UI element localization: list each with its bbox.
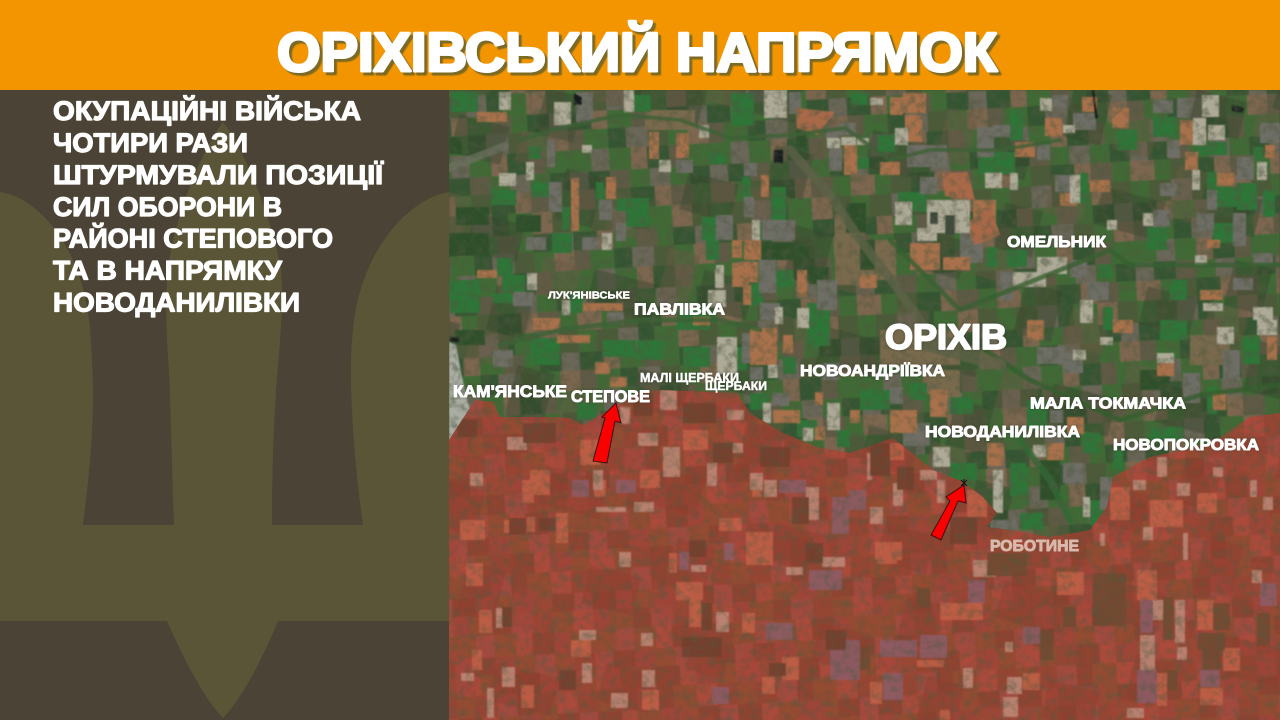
noise texture (449, 90, 1280, 533)
label: Мала Токмачка: МАЛА ТОКМАЧКА (1030, 396, 1186, 412)
header band (0, 0, 1280, 90)
label: Новоандріївка: НОВОАНДРІЇВКА (800, 362, 945, 380)
label: Омельник: ОМЕЛЬНИК (1007, 234, 1106, 251)
arrow: assault toward Stepove (593, 403, 621, 463)
label: Щербаки: ЩЕРБАКИ (705, 379, 767, 393)
ponds (450, 90, 1244, 342)
reservoir at the western edge (449, 342, 470, 445)
label: Новоданилівка: НОВОДАНИЛІВКА (925, 424, 1080, 441)
label: Роботине: РОБОТИНЕ (990, 538, 1079, 555)
panel: satellite map (449, 90, 1280, 720)
label: Лук'янівське: ЛУК'ЯНІВСЬКЕ (548, 290, 630, 302)
label: Кам'янське: КАМ'ЯНСЬКЕ (453, 382, 567, 401)
impact marker (961, 479, 967, 487)
label: Степове: СТЕПОВЕ (571, 387, 650, 406)
left panel background (0, 90, 449, 720)
texture over occupied territory (449, 385, 1280, 720)
line 6: ТА В НАПРЯМКУ (53, 256, 283, 286)
fields in occupied territory (457, 390, 1277, 720)
farmland fields north of the front line (449, 90, 1280, 533)
line 1: ОКУПАЦІЙНІ ВІЙСЬКА (53, 95, 361, 126)
line 5: РАЙОНІ СТЕПОВОГО (53, 222, 333, 254)
label: Оріхів: ОРІХІВ (885, 318, 1007, 357)
arrow: assault toward Novodanylivka (931, 485, 966, 540)
label: Малі Щербаки: МАЛІ ЩЕРБАКИ (640, 370, 739, 385)
title: ОРІХІВСЬКИЙ НАПРЯМОК (277, 20, 997, 83)
underlying farmland (449, 408, 1112, 533)
line 3: ШТУРМУВАЛИ ПОЗИЦІЇ (53, 160, 385, 190)
map labels (453, 234, 1259, 454)
map base patchwork (449, 90, 1280, 537)
river corridors and villages (449, 115, 1280, 520)
label: Павлівка: ПАВЛІВКА (634, 302, 725, 318)
occupied territory (red overlay) (449, 385, 1280, 720)
line 7: НОВОДАНИЛІВКИ (53, 288, 300, 318)
red tint (449, 385, 1280, 720)
trident emblem watermark (0, 122, 449, 718)
line 2: ЧОТИРИ РАЗИ (53, 128, 248, 158)
line 4: СИЛ ОБОРОНИ В (53, 192, 282, 222)
label: Новопокровка: НОВОПОКРОВКА (1113, 437, 1259, 454)
text block: situation summary (53, 95, 385, 318)
